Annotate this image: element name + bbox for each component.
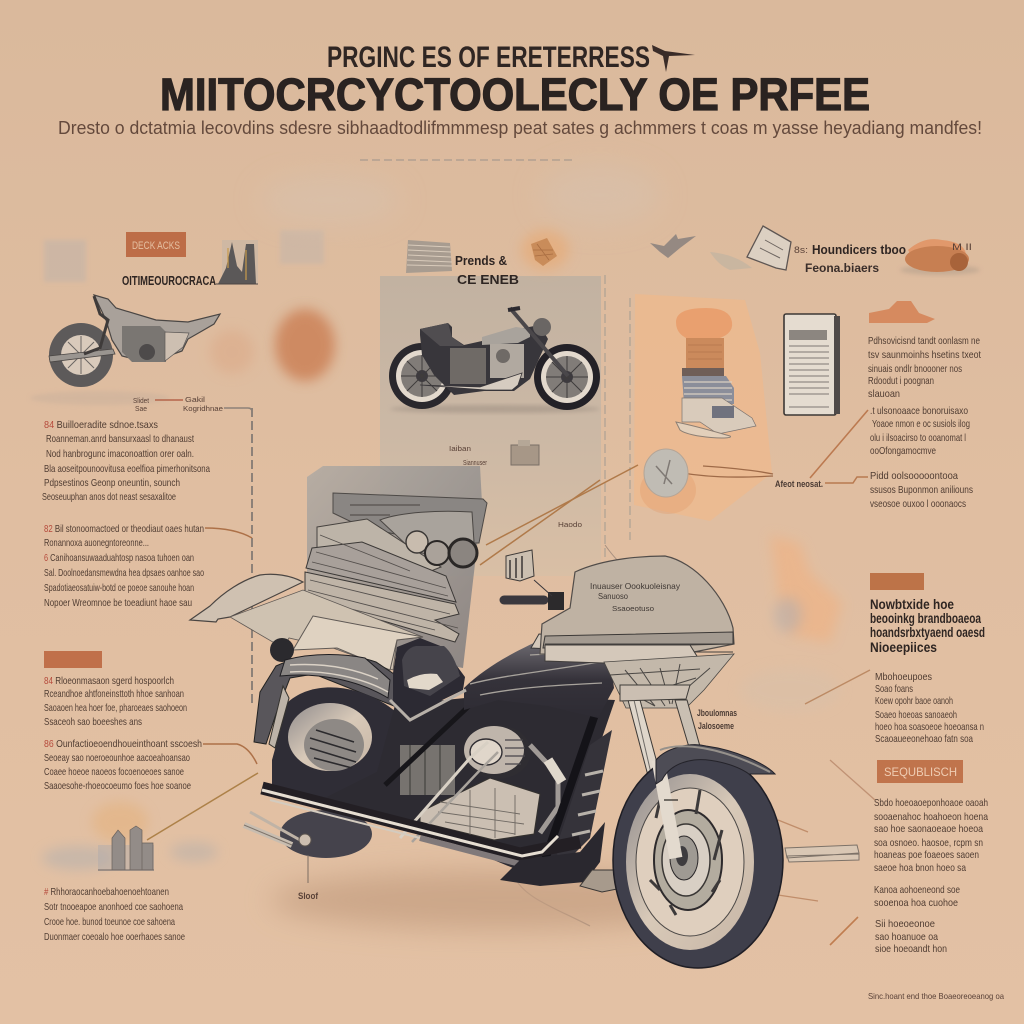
text block: left 2: Spadotiaeosatuiw-botd oe poeoe sanouhe hoan: [44, 582, 194, 594]
text block: left 5: Crooe hoe. bunod toeunoe coe sahoena: [44, 916, 175, 928]
icon: orange hat top right: [869, 301, 935, 323]
text block: left 4: Saaoesohe-rhoeocoeumo foes hoe soanoe: [44, 780, 191, 792]
text block: left 1: Bla aoseitpounoovitusa eoelfioa pimerhonitsona: [44, 463, 210, 475]
heading: right middle: [870, 597, 985, 655]
icon: centre motorcycle: [389, 308, 600, 413]
icon: document: [784, 314, 840, 415]
small book: right of wheel: [785, 845, 859, 862]
air cleaner: [463, 725, 562, 833]
side vents: [556, 730, 612, 868]
caption: left small label: [133, 397, 252, 413]
text block: right 5: Sbdo hoeoaoeponhoaoe oaoah: [874, 797, 988, 809]
text block: left 5: Duonmaer coeoalo hoe ooerhaoes sanoe: [44, 931, 185, 943]
fairing: Inuauser Oookuoleisnay: [590, 581, 681, 591]
icon: orange motorcycle: [900, 239, 980, 275]
badge: left middle: [44, 651, 102, 668]
icon: small centre diagram: Iaiban: [449, 446, 471, 453]
panel: lower grey block: [307, 466, 482, 668]
text block: left 5: # Rhhoraocanhoebahoenoehtoanen: [44, 886, 169, 898]
text block: right 7: sao hoanuoe oa: [875, 931, 938, 943]
heading: right middle: Nowbtxide hoe: [870, 597, 954, 612]
heading: right middle: hoandsrbxtyaend oaesd: [870, 625, 985, 640]
heading: top right: Feona.biaers: [805, 261, 879, 275]
fairing: Ssaoeotuso: [612, 604, 654, 613]
heading: left top: OITIMEOUROCRACA: [122, 273, 216, 288]
badge: right lower: [877, 760, 963, 783]
headlight block: [620, 685, 690, 701]
panel: orange polygon: [634, 294, 772, 521]
heading: top right: Houndicers tboo: [812, 242, 906, 257]
icon: small centre diagram: Siannuser: [463, 460, 488, 467]
heading: right middle: Nioeepiices: [870, 640, 937, 655]
transmission: [400, 745, 540, 840]
text block: left 2: Ronannoxa auonegntoreonne...: [44, 537, 149, 549]
front fender: [656, 745, 775, 784]
text block: left 1: Seoseuuphan anos dot neast sesaxalitoe: [42, 491, 176, 503]
handlebar and instrument: [504, 550, 564, 610]
text block: right 4: Mbohoeupoes: [875, 671, 932, 683]
label: under rear: [298, 855, 319, 901]
text block: right 1: Rdoodut i poognan: [868, 375, 934, 387]
text block: right 2: ooOfongamocmve: [870, 445, 936, 457]
text block: right 4: Koew opohr baoe oanoh: [875, 695, 953, 707]
connector lines: [147, 160, 875, 945]
text block: left 1: Roanneman.anrd bansurxaasl to dhanaust: [46, 433, 194, 445]
icon: orange patch top centre: [521, 230, 569, 270]
caption: left small label: Slidet: [133, 398, 149, 405]
text block: right 3: ssusos Buponmon aniliouns: [870, 484, 973, 496]
heading: centre panel: [455, 253, 519, 287]
heading: top right: [794, 242, 906, 275]
text block: right 5: hoaneas poe foaeoes saoen: [874, 849, 979, 861]
text block: right 1: tsv saunmoinhs hsetins txeot: [868, 349, 981, 361]
text block: right 1: slauoan: [868, 388, 900, 400]
text block: left 5: Sotr tnooeapoe anonhoed coe saohoena: [44, 901, 183, 913]
text block: left 3: Saoaoen hea hoer foe, pharoeaes saohoeon: [44, 702, 187, 714]
text block: right 4: hoeo hoa soasoeoe hoeoansa n: [875, 721, 984, 733]
text block: right 5: saeoe hoa bnon hoeo sa: [874, 862, 966, 874]
chart: left top bars: [216, 240, 258, 284]
paper stack: engine sketch: [305, 493, 487, 642]
label: right centre: Afeot neosat.: [775, 479, 823, 490]
text block: right 2: olu i ilsoacirso to ooanomat l: [870, 432, 966, 444]
front forks: [628, 700, 701, 859]
text block: right 6: sooenoa hoa cuohoe: [874, 897, 958, 909]
text block: right 3: Pidd oolsooooontooa: [870, 470, 958, 482]
icon: small centre diagram: [449, 440, 582, 529]
frame bars: [385, 700, 600, 860]
title block: MIITOCRCYCTOOLECLY OE PRFEE: [160, 69, 870, 120]
text block: right 7: Sii hoeoeonoe: [875, 918, 935, 930]
engine bay: [317, 695, 615, 878]
caption: left small label: Gakil: [185, 397, 206, 404]
front wheel: [613, 752, 783, 968]
label: under rear: Sloof: [298, 891, 319, 901]
label: fork: [697, 708, 737, 731]
text block: right 2: Yoaoe nmon e oc susiols ilog: [872, 418, 970, 430]
text block: left 1: Pdpsestinos Geonp oneuntin, sounch: [44, 477, 180, 489]
text block: right 2: [870, 405, 970, 457]
text block: left 2: Nopoer Wreomnoe be toeadiunt haoe sau: [44, 597, 192, 609]
text block: right 5: sooaenahoc hoahoeon hoena: [874, 811, 988, 823]
icon: top bird: [650, 234, 696, 258]
text block: right 3: [870, 470, 973, 510]
motorcycle: main illustration: [190, 550, 783, 968]
caption: left small label: Kogridhnae: [183, 406, 223, 413]
text block: right 4: [875, 671, 984, 745]
text block: right 4: Soao foans: [875, 683, 913, 695]
rear mudguard highlights: [280, 654, 390, 698]
title block: Dresto o dctatmia lecovdins sdesre sibhaadtodlifmmmesp peat sates g achmmers t coas m yasse heyadiang mandfes!: [58, 118, 982, 138]
text block: left 1: 84 Builloeradite sdnoe.tsaxs: [44, 419, 158, 431]
text block: right 1: Pdhsovicisnd tandt oonlasm ne: [868, 335, 980, 347]
fairing: [540, 556, 734, 708]
text block: left 2: 6 Canihoansuwaaduahtosp nasoa tuhoen oan: [44, 552, 194, 564]
text block: right 6: [874, 884, 960, 909]
text block: right 6: Kanoa aohoeneond soe: [874, 884, 960, 896]
text block: left 5: [44, 886, 185, 943]
text block: right 4: Scaoaueeonehoao fatn soa: [875, 733, 973, 745]
icon: circular diagram: [640, 449, 696, 514]
text block: left 3: Rceandhoe ahtfoneinsttoth hhoe sanhoan: [44, 688, 184, 700]
heading: right middle: beooinkg brandboaeoa: [870, 611, 981, 626]
icon: orange motorcycle: M II: [952, 242, 972, 252]
rear wheel: [272, 687, 396, 858]
text block: left 2: Sal. Doolnoedansmewdna hea dpsaes oanhoe sao: [44, 567, 204, 579]
label: fork: Jboulomnas: [697, 708, 737, 718]
windshield flaps: [190, 574, 423, 670]
seat: [390, 638, 466, 720]
footer note: Sinc.hoant end thoe Boaeoreoeanog oa: [868, 991, 1004, 1001]
text block: right 1: [868, 335, 981, 400]
badge: right middle: [870, 573, 924, 590]
caption: left small label: Sae: [135, 406, 147, 413]
text block: right 3: vseosoe ouxoo l ooonaocs: [870, 498, 966, 510]
icon: hat and book stack: [676, 308, 756, 438]
text block: left 2: 82 Bil stonoomactoed or theodiaut oaes hutan: [44, 523, 204, 535]
heading: left top badge: [126, 232, 186, 257]
icon: top right device: [710, 226, 791, 270]
text block: right 7: sioe hoeoandt hon: [875, 943, 947, 955]
text block: left 4: 86 Ounfactioeoendhoueinthoant sscoesh: [44, 738, 202, 750]
chart: lower left: [98, 826, 154, 871]
text block: right 4: Soaeo hoeoas sanoaeoh: [875, 709, 957, 721]
heading: left top badge: DECK ACKS: [132, 240, 180, 252]
text block: left 1: Nod hanbrogunc imaconoattion orer oaln.: [46, 448, 194, 460]
text block: left 3: Ssaceoh sao boeeshes ans: [44, 716, 142, 728]
text block: left 4: [44, 738, 202, 792]
text block: left 2: [44, 523, 204, 609]
icon: left motorcycle: [30, 295, 220, 405]
heading: centre panel: CE ENEB: [457, 272, 519, 287]
text block: left 3: 84 Rloeonmasaon sgerd hospoorlch: [44, 675, 174, 687]
text block: left 4: Seoeay sao noeroeounhoe aacoeahoansao: [44, 752, 190, 764]
heading: centre panel: Prends &: [455, 253, 507, 268]
icon: paper stack top centre: [406, 240, 452, 273]
title block: PRGINC ES OF ERETERRESS: [327, 41, 650, 74]
text block: right 2: .t ulsonoaace bonoruisaxo: [870, 405, 968, 417]
exhaust pipes: [244, 788, 580, 864]
icon: small centre diagram: Haodo: [558, 522, 582, 529]
text block: left 4: Coaee hoeoe naoeos focoenoeoes sanoe: [44, 766, 184, 778]
lower engine guard: [500, 822, 605, 886]
text block: right 5: sao hoe saonaoeaoe hoeoa: [874, 823, 983, 835]
panel: centre grey column: [380, 276, 601, 576]
text block: left 3: [44, 675, 187, 728]
text block: right 7: [875, 918, 947, 955]
badge: right lower: SEQUBLISCH: [884, 765, 957, 779]
rear fender and body: [254, 655, 394, 744]
soft background blobs: [42, 165, 842, 870]
label: fork: Jalosoeme: [698, 721, 734, 731]
title block: [58, 41, 982, 138]
heading: top right: 8s:: [794, 245, 808, 255]
fairing: Sanuoso: [598, 592, 629, 601]
shadow: [270, 870, 730, 930]
text block: right 1: sinuais ondlr bnoooner nos: [868, 363, 962, 375]
text block: left 1: [42, 419, 210, 503]
fuel tank: [464, 642, 614, 718]
text block: right 5: [874, 797, 988, 874]
text block: right 5: soa osnoeo. haosoe, rcpm sn: [874, 837, 983, 849]
